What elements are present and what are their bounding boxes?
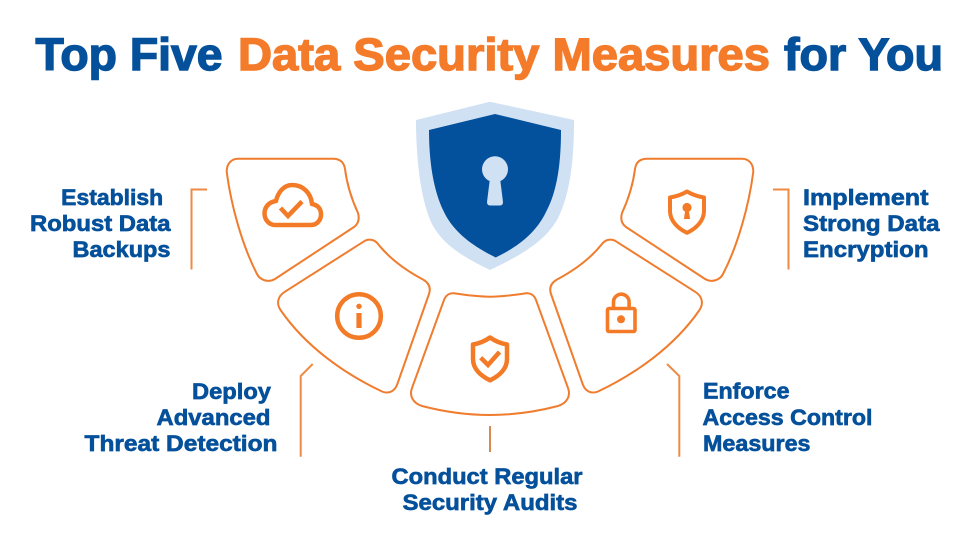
panel: implement strong data encryption	[621, 159, 753, 281]
label: enforce access control measures: Enforce	[703, 378, 790, 404]
icon: shield with check	[473, 338, 507, 380]
leader line: threat detection	[301, 364, 313, 457]
label: implement strong data encryption: Implement	[803, 185, 929, 210]
label: establish robust data backups: Establish	[61, 185, 163, 210]
label: establish robust data backups: Robust Data	[30, 211, 171, 236]
title	[36, 29, 943, 80]
label: implement strong data encryption: Strong Data	[803, 211, 940, 236]
panel: conduct regular security audits	[411, 293, 569, 415]
title: for You	[784, 29, 943, 80]
label: implement strong data encryption: Encryption	[803, 237, 928, 262]
title: Top Five	[36, 29, 223, 80]
label: establish robust data backups: Backups	[72, 237, 170, 262]
label: deploy advanced threat detection: Deploy	[192, 379, 272, 404]
label: deploy advanced threat detection	[84, 379, 278, 456]
icon: cloud with check	[264, 185, 321, 225]
icon: padlock	[608, 294, 635, 332]
central shield with keyhole	[416, 102, 574, 270]
icon: info circle	[337, 294, 381, 338]
icon: shield with keyhole	[670, 192, 704, 233]
panel: establish robust data backups	[227, 159, 359, 281]
label: implement strong data encryption	[803, 185, 940, 262]
label: conduct regular security audits	[392, 464, 583, 515]
label: establish robust data backups	[30, 185, 171, 262]
label: enforce access control measures: Access Control	[702, 405, 872, 430]
label: enforce access control measures	[702, 378, 872, 456]
leader line: backups	[192, 190, 207, 270]
label: enforce access control measures: Measures	[703, 431, 810, 456]
label: deploy advanced threat detection: Threat Detection	[84, 431, 278, 456]
label: conduct regular security audits: Conduct Regular	[392, 464, 583, 489]
label: conduct regular security audits: Security Audits	[402, 490, 578, 515]
leader line: encryption	[773, 190, 788, 270]
label: deploy advanced threat detection: Advanced	[156, 405, 270, 430]
title: Data Security Measures	[238, 29, 770, 80]
panel: enforce access control measures	[550, 240, 702, 393]
leader line: access control	[667, 364, 679, 457]
leader line: security audits	[489, 426, 491, 452]
panel: deploy advanced threat detection	[278, 240, 430, 393]
